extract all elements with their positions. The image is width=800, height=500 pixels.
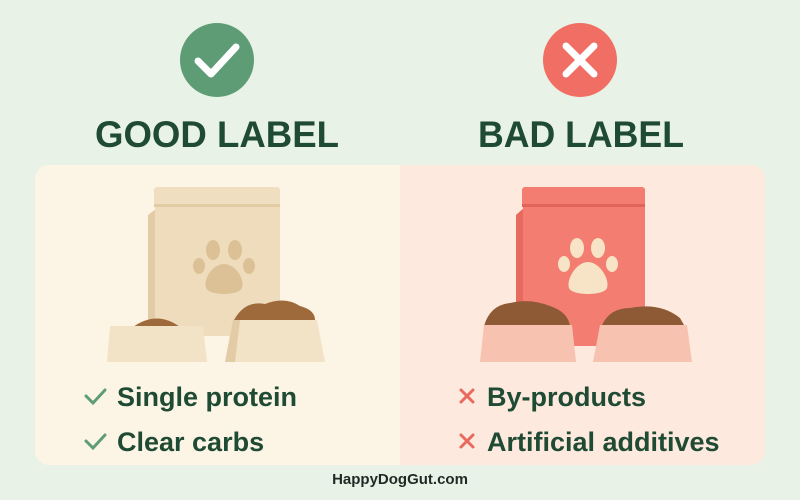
heading: bad label: BAD LABEL bbox=[478, 114, 684, 155]
text: bad items: Artificial additives bbox=[487, 427, 720, 457]
text: bad items bbox=[461, 382, 720, 457]
text: good items: Single protein bbox=[117, 382, 297, 412]
footer: site name: HappyDogGut.com bbox=[332, 471, 468, 488]
text: bad items: By-products bbox=[487, 382, 646, 412]
icon: good food bag and bowls bbox=[107, 187, 325, 362]
icon: bad food bag and bowls bbox=[480, 187, 692, 362]
text: good items: Clear carbs bbox=[117, 427, 264, 457]
text: good items bbox=[86, 382, 297, 457]
icon: check circle bbox=[180, 23, 254, 97]
panel: background bbox=[35, 165, 765, 465]
icon: cross circle bbox=[543, 23, 617, 97]
heading: good label: GOOD LABEL bbox=[95, 114, 339, 155]
